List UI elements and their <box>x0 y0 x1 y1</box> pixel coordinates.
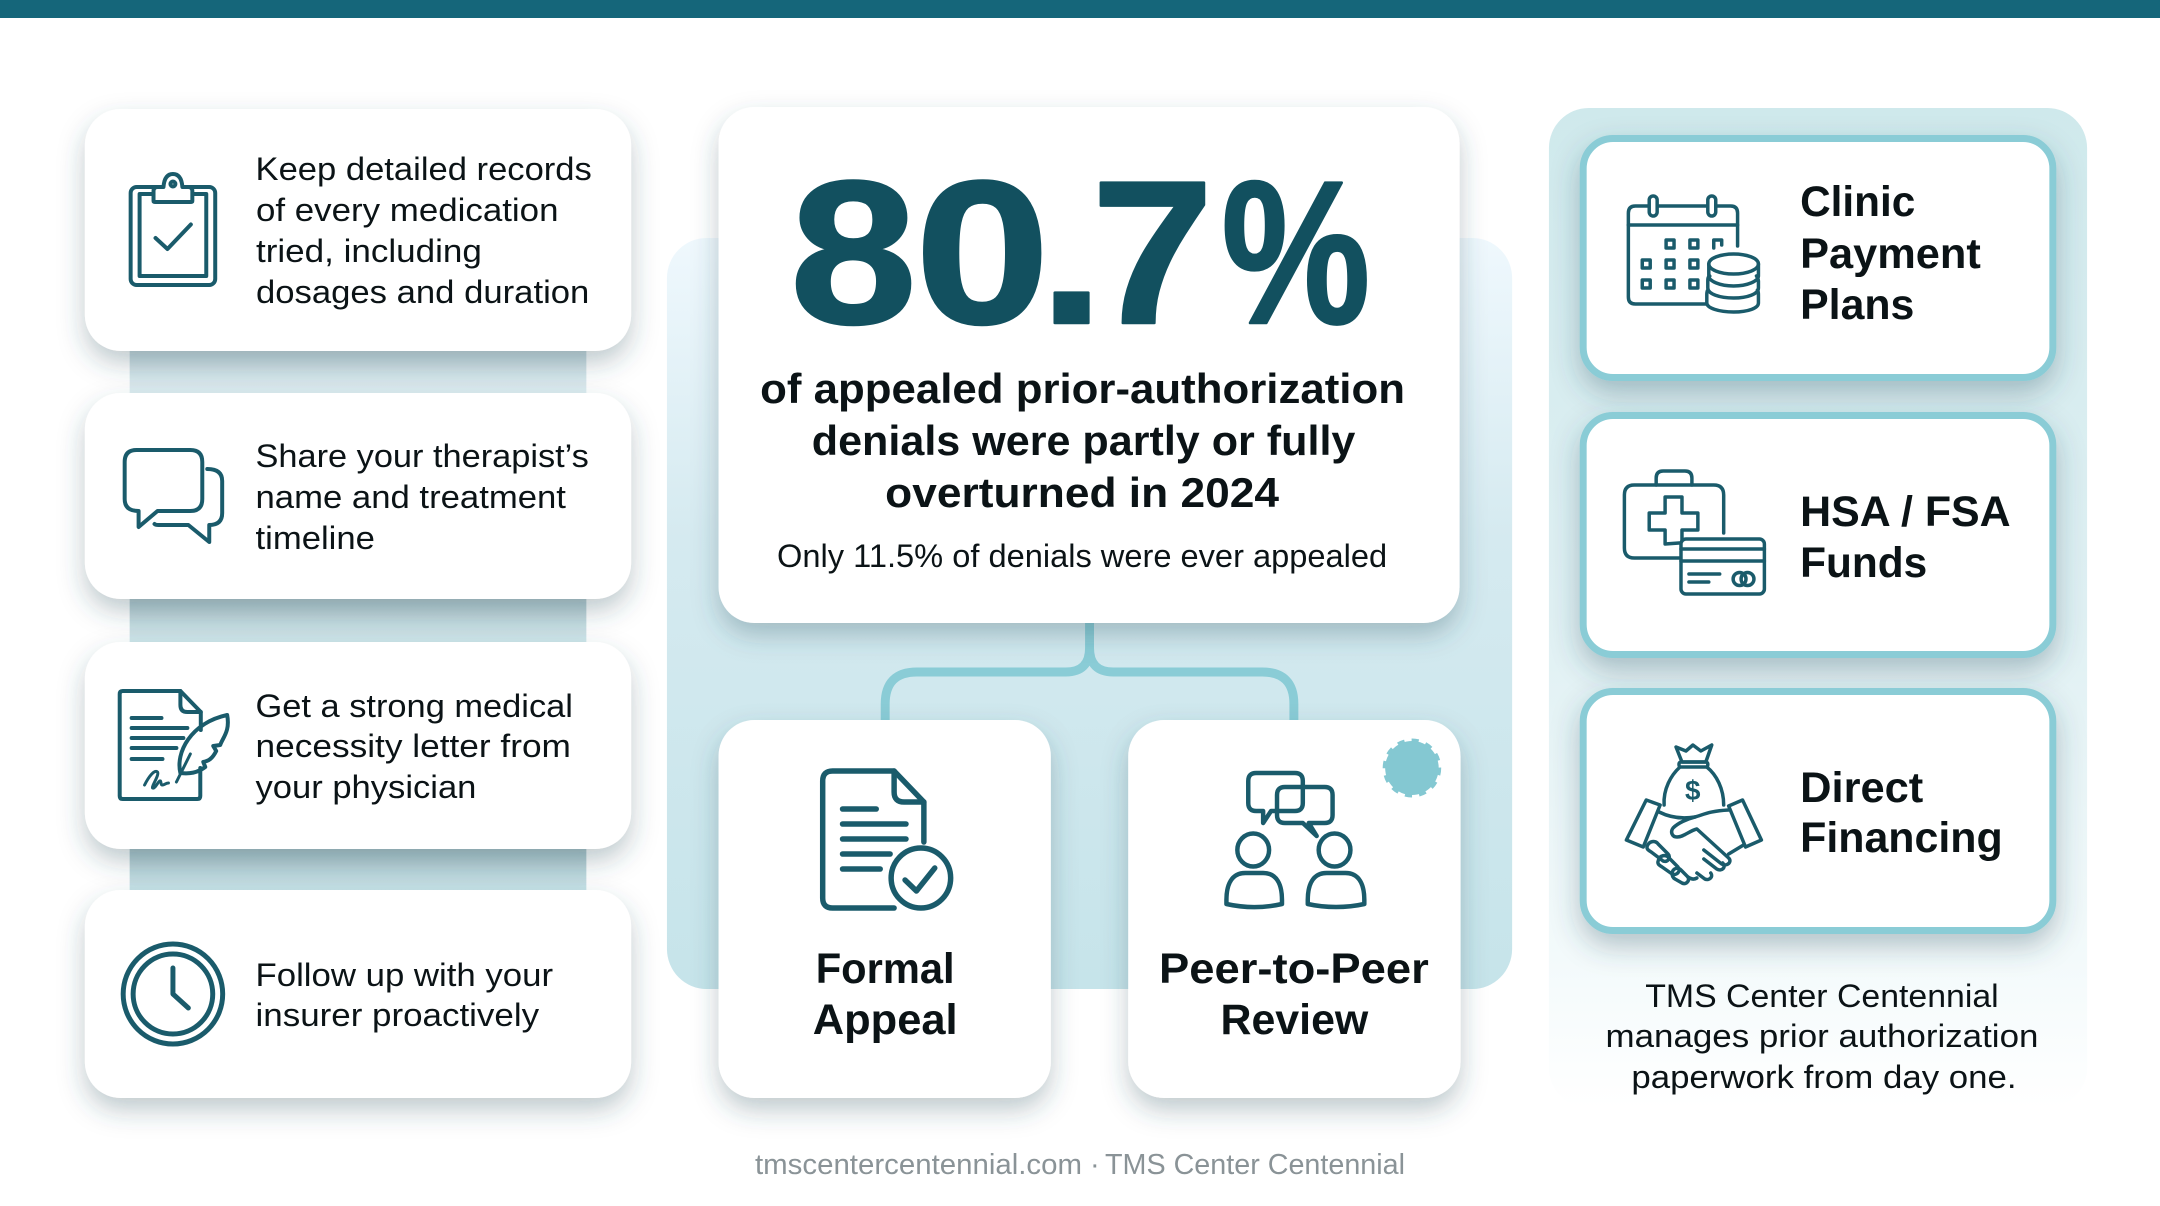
heading: denials were partly or fully <box>812 417 1356 464</box>
badge <box>1384 740 1440 796</box>
card: keep records <box>85 109 631 351</box>
footer: tmscentercentennial.com <box>755 1149 1082 1181</box>
top bar <box>0 0 2160 18</box>
text: share therapist: Share your therapist’s <box>256 438 589 474</box>
card: direct financing <box>1583 692 2053 930</box>
footer: TMS Center Centennial <box>1105 1149 1405 1181</box>
text: keep records <box>256 151 592 310</box>
dollar sign: $ <box>1685 775 1701 806</box>
panel background <box>667 238 1512 989</box>
big number: 8 <box>790 139 917 367</box>
text: medical letter: necessity letter from <box>256 728 571 764</box>
panel: payment options <box>1549 108 2087 1108</box>
label: Financing <box>1800 814 2003 862</box>
icon: letter with quill <box>120 691 228 799</box>
text: follow up: insurer proactively <box>256 997 539 1033</box>
card: peer review <box>1128 720 1461 1098</box>
icon: clock <box>123 944 223 1044</box>
text: keep records: of every medication <box>256 192 558 228</box>
panel: appeals outcome <box>667 107 1512 1098</box>
label: Appeal <box>813 996 958 1044</box>
big number: . <box>1039 139 1104 367</box>
note: paperwork: paperwork from day one. <box>1631 1059 2017 1095</box>
icon: medical kit and card <box>1624 471 1764 594</box>
label: Formal <box>816 945 955 993</box>
heading: of appealed prior-authorization <box>760 365 1405 412</box>
icon: chat bubbles <box>125 450 222 542</box>
label: Clinic <box>1800 178 1915 226</box>
text: medical letter: Get a strong medical <box>256 688 573 724</box>
card: medical letter <box>85 642 631 849</box>
heading: overturned in 2024 <box>885 469 1280 516</box>
note: paperwork: manages prior authorization <box>1606 1018 2038 1054</box>
label: Review <box>1220 996 1369 1044</box>
connector strip 1 <box>130 345 586 395</box>
text: share therapist <box>256 438 589 556</box>
label: Direct <box>1800 764 1923 812</box>
big number: 7 <box>1092 139 1214 367</box>
label: Plans <box>1800 281 1914 329</box>
connector strip 2 <box>130 595 586 645</box>
note: paperwork <box>1606 978 2038 1095</box>
text: share therapist: name and treatment <box>256 479 566 515</box>
label <box>1800 178 1981 329</box>
heading <box>760 365 1405 516</box>
text: follow up <box>256 957 553 1033</box>
card: formal appeal <box>719 720 1051 1098</box>
subtext: Only 11.5% of denials were ever appealed <box>777 538 1387 574</box>
connector: appeal branches <box>885 620 1294 724</box>
label: Peer-to-Peer <box>1159 945 1429 993</box>
label <box>1800 764 2003 862</box>
label: Payment <box>1800 230 1981 278</box>
big number: % <box>1221 139 1370 367</box>
footer <box>755 1149 1405 1181</box>
text: medical letter <box>256 688 573 805</box>
label <box>813 945 958 1044</box>
text: keep records: Keep detailed records <box>256 151 592 187</box>
label <box>1800 488 2011 587</box>
big number: 0 <box>915 139 1050 367</box>
label <box>1159 945 1429 1044</box>
card: follow up <box>85 890 631 1098</box>
text: keep records: dosages and duration <box>256 274 589 310</box>
big number <box>790 139 1370 367</box>
icon: document with check <box>823 771 951 908</box>
panel background <box>1549 108 2087 1108</box>
icon: money bag and handshake <box>1626 745 1761 884</box>
card: share therapist <box>85 393 631 599</box>
text: share therapist: timeline <box>256 520 375 556</box>
text: medical letter: your physician <box>256 769 476 805</box>
label: Funds <box>1800 539 1927 587</box>
label: HSA / FSA <box>1800 488 2011 536</box>
icon: two people talking <box>1226 773 1364 907</box>
footer: · <box>1090 1149 1100 1181</box>
card: headline statistic <box>719 107 1460 623</box>
connector strip 3 <box>130 845 586 893</box>
icon: clipboard <box>131 174 215 285</box>
panel: preparation checklist <box>85 109 631 1098</box>
card: clinic payment plans <box>1583 138 2053 378</box>
note: paperwork: TMS Center Centennial <box>1645 978 1999 1014</box>
card: hsa fsa funds <box>1583 416 2053 654</box>
icon: calendar and coins <box>1628 196 1758 312</box>
text: follow up: Follow up with your <box>256 957 553 993</box>
text: keep records: tried, including <box>256 233 482 269</box>
